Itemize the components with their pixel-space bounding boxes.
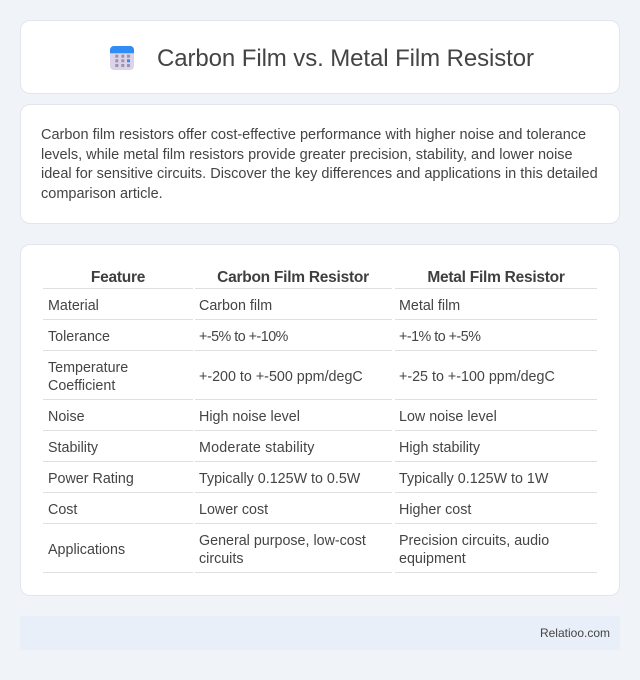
intro paragraph — [41, 127, 598, 202]
row: power rating — [48, 471, 548, 487]
panel: intro text — [20, 104, 620, 224]
row: power rating: Power Rating — [48, 471, 134, 487]
panel: title card — [20, 20, 620, 94]
table header: Feature — [91, 269, 145, 286]
title: Carbon Film vs. Metal Film Resistor — [157, 45, 534, 72]
table header — [91, 269, 565, 286]
panel: comparison table — [20, 244, 620, 596]
row: applications — [48, 533, 549, 567]
row: applications: equipment — [399, 551, 466, 567]
row: temperature coefficient: +-25 to +-100 ppm/degC — [399, 369, 555, 385]
row: temperature coefficient: Coefficient — [48, 378, 115, 394]
row: applications: Precision circuits, audio — [399, 533, 549, 549]
row: material: Carbon film — [199, 298, 272, 314]
row: cost: Cost — [48, 502, 77, 518]
row: applications: General purpose, low-cost — [199, 533, 366, 549]
row: noise: Noise — [48, 409, 85, 425]
icon: calendar — [110, 46, 134, 70]
row: cost: Higher cost — [399, 502, 471, 518]
row: tolerance — [48, 329, 480, 345]
row: temperature coefficient: +-200 to +-500 ppm/degC — [199, 369, 363, 385]
row: applications: Applications — [48, 542, 125, 558]
row: applications: circuits — [199, 551, 243, 567]
row: temperature coefficient — [48, 360, 555, 394]
row: tolerance: +-1% to +-5% — [399, 329, 480, 345]
table header: Metal Film Resistor — [427, 269, 565, 286]
footer credit: Relatioo.com — [540, 626, 610, 640]
intro paragraph: comparison article. — [41, 186, 163, 202]
row: noise: Low noise level — [399, 409, 497, 425]
row: stability: Stability — [48, 440, 98, 456]
row: tolerance: +-5% to +-10% — [199, 329, 288, 345]
row: material: Metal film — [399, 298, 460, 314]
row: temperature coefficient: Temperature — [48, 360, 128, 376]
intro paragraph: levels, while metal film resistors provide greater precision, stability, and lower noise — [41, 146, 573, 162]
row: power rating: Typically 0.125W to 0.5W — [199, 471, 360, 487]
table header: Carbon Film Resistor — [217, 269, 369, 286]
row: noise: High noise level — [199, 409, 300, 425]
row: cost: Lower cost — [199, 502, 268, 518]
row: noise — [48, 409, 497, 425]
row: cost — [48, 502, 472, 518]
row: material — [48, 298, 460, 314]
intro paragraph: Carbon film resistors offer cost-effective performance with higher noise and tolerance — [41, 127, 586, 143]
row: tolerance: Tolerance — [48, 329, 110, 345]
row: stability: Moderate stability — [199, 440, 315, 456]
row: material: Material — [48, 298, 99, 314]
row: stability: High stability — [399, 440, 480, 456]
intro paragraph: ideal for sensitive circuits. Discover the key differences and applications in this detailed — [41, 166, 598, 182]
row: stability — [48, 440, 480, 456]
row: power rating: Typically 0.125W to 1W — [399, 471, 548, 487]
footer bar — [20, 616, 620, 650]
